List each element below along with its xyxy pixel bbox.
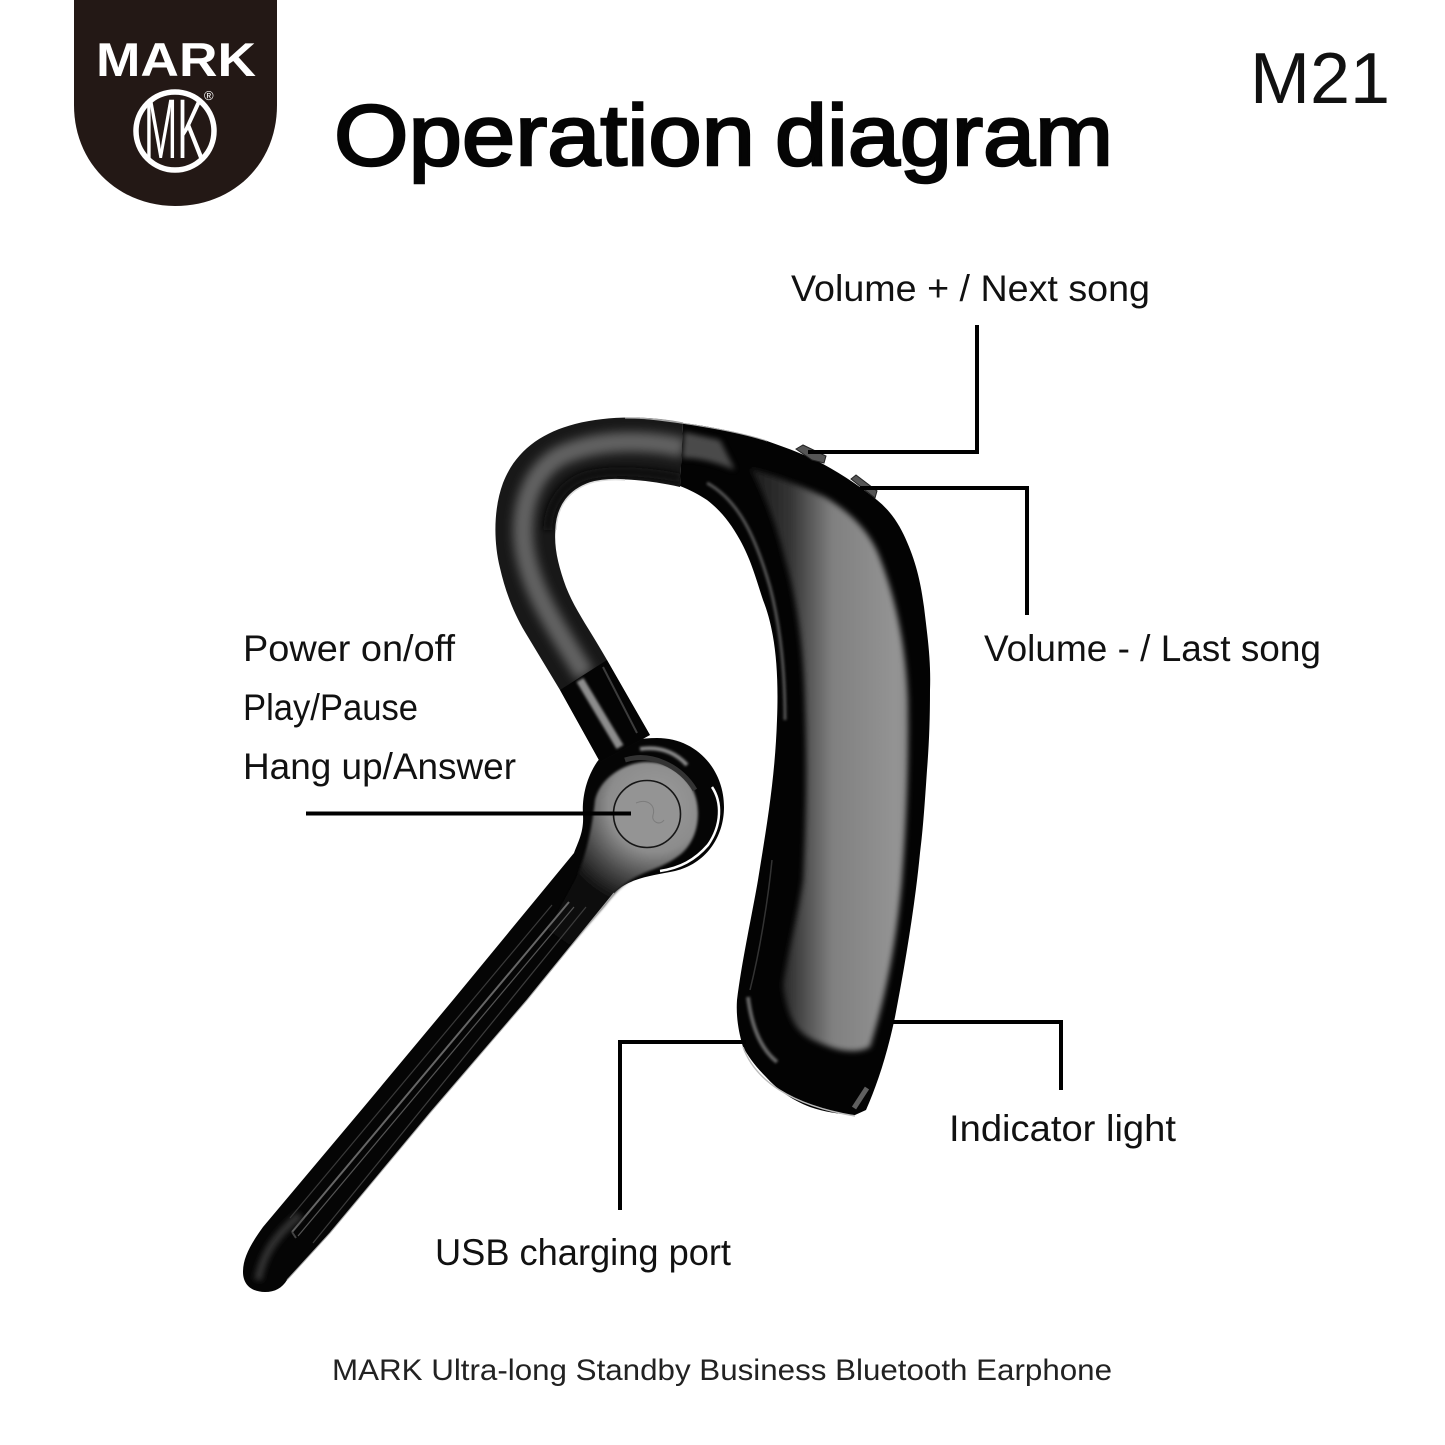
stem highlight lines <box>258 893 614 1280</box>
housing rim highlight <box>640 748 687 765</box>
title <box>334 88 1113 184</box>
callout line: volume minus <box>860 488 1027 615</box>
ear hook <box>495 418 684 762</box>
button circle <box>614 780 680 848</box>
logo emblem <box>136 82 214 176</box>
glossy gray reflection <box>750 468 908 1051</box>
label: volume plus: Volume + / Next song <box>791 268 1150 309</box>
label: USB charging port: USB charging port <box>435 1232 732 1273</box>
model number: M21 <box>1250 39 1390 119</box>
top edge highlight <box>640 418 767 441</box>
label: indicator light: Indicator light <box>949 1108 1177 1149</box>
title: Operation <box>334 88 755 184</box>
label: volume minus: Volume - / Last song <box>984 628 1321 669</box>
label: multifunction button: Power on/off <box>243 628 456 669</box>
housing gray face <box>548 762 698 945</box>
main body <box>640 418 930 1116</box>
footer caption: MARK Ultra-long Standby Business Bluetooth Earphone <box>332 1354 1112 1387</box>
inner edge reflection <box>707 483 785 720</box>
bottom tip reflection <box>854 1088 867 1108</box>
label: multifunction button: Play/Pause <box>243 687 418 728</box>
label: multifunction button <box>243 628 516 787</box>
callout line: volume plus <box>808 325 977 452</box>
logo badge <box>74 0 277 206</box>
label: multifunction button: Hang up/Answer <box>243 746 516 787</box>
hook collar <box>560 660 650 762</box>
title: diagram <box>775 88 1113 184</box>
registered mark: ® <box>204 88 214 103</box>
callout line: multifunction button <box>306 812 631 816</box>
volume plus button <box>796 445 826 463</box>
hook highlight <box>556 480 625 530</box>
earphone stem and button housing <box>243 738 724 1292</box>
callout line: indicator light <box>893 1022 1061 1090</box>
logo wordmark: MARK <box>96 33 256 86</box>
callout line: USB charging port <box>620 1042 746 1210</box>
logo emblem: MK <box>144 82 204 176</box>
white crescent edge <box>660 787 719 871</box>
volume minus button <box>851 475 877 498</box>
earphone illustration <box>243 418 930 1292</box>
